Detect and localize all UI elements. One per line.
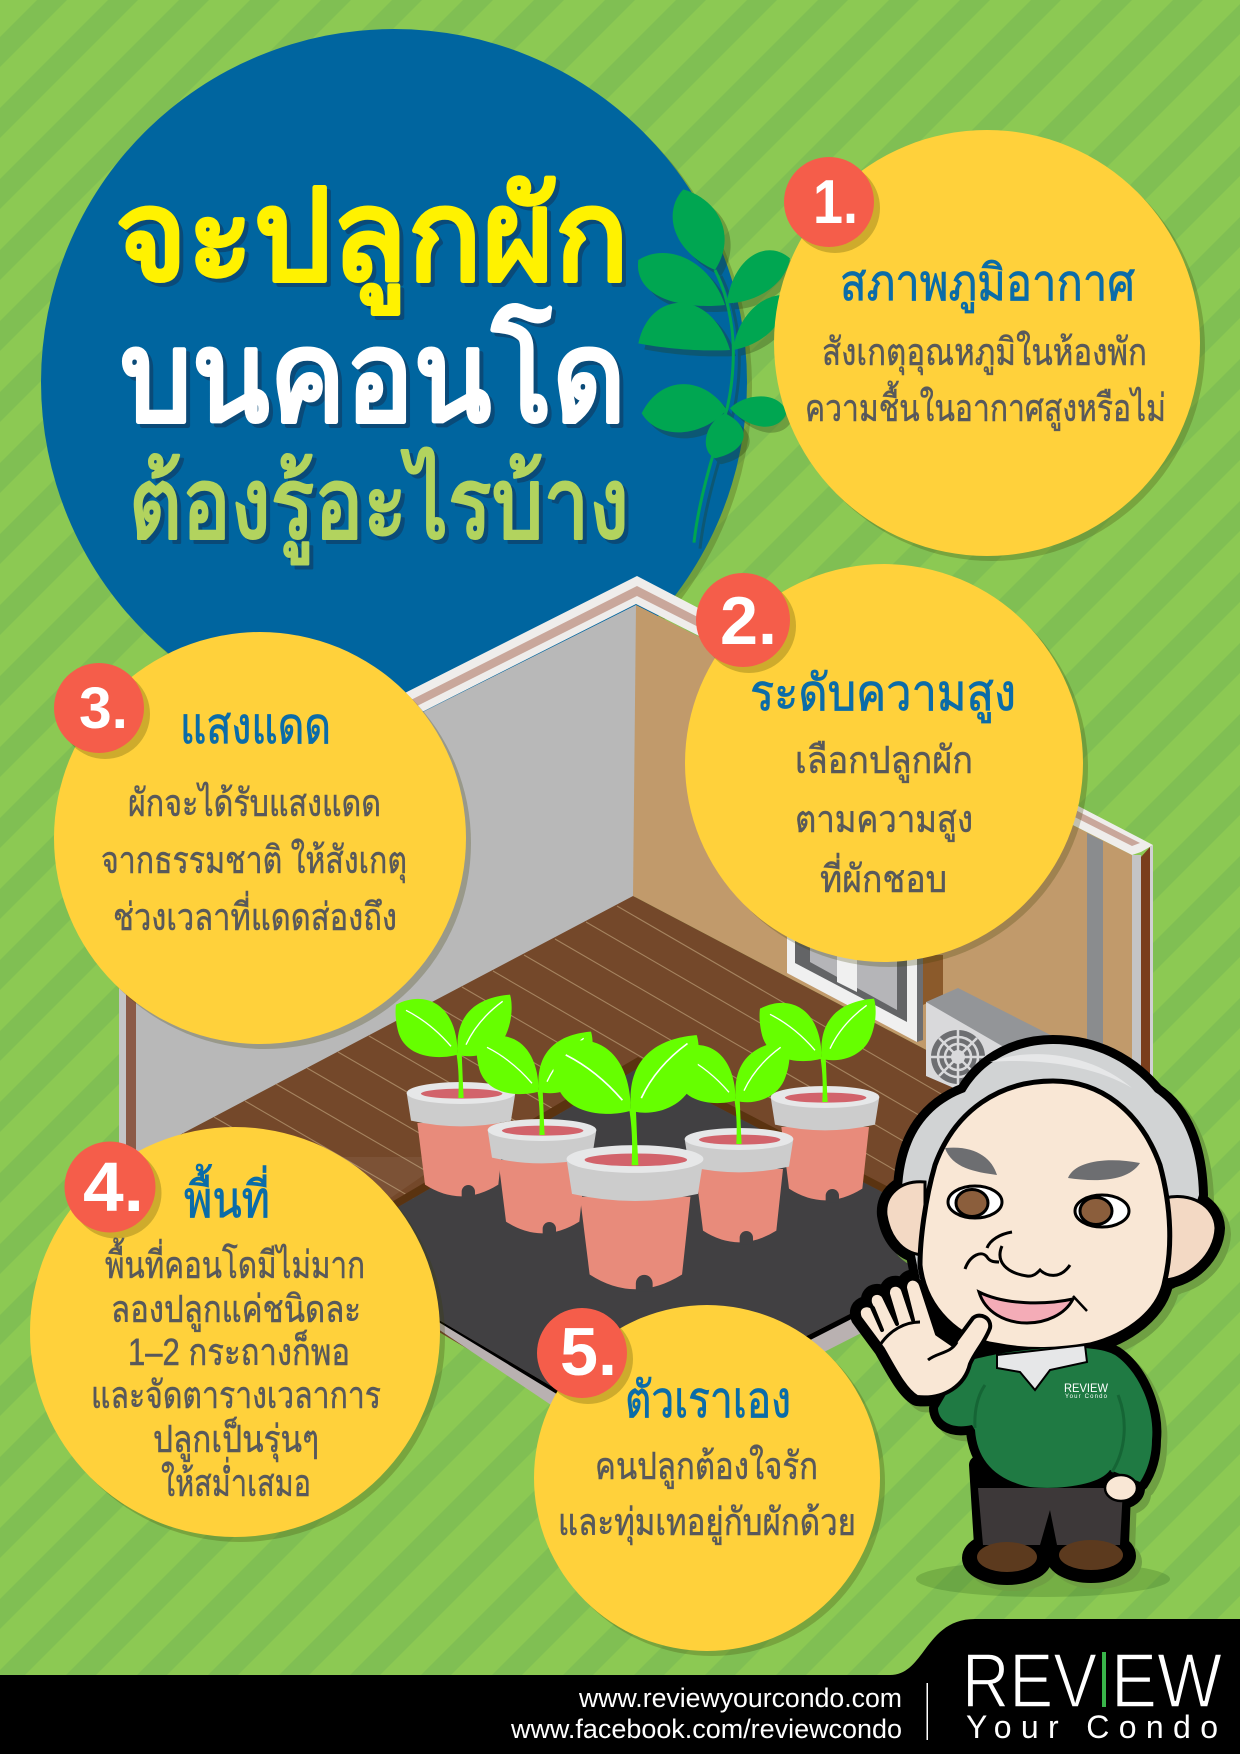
panel: 4 space <box>30 1127 445 1542</box>
body text: ที่ผักชอบ <box>820 853 947 901</box>
panel: 1 climate <box>774 130 1205 561</box>
body text: ผักจะได้รับแสงแดด <box>128 782 381 825</box>
silhouette outline <box>859 1044 1216 1576</box>
body text: จากธรรมชาติ ให้สังเกตุ <box>101 839 407 883</box>
body text: ปลูกเป็นรุ่นๆ <box>153 1416 319 1462</box>
window <box>787 900 943 1042</box>
logo: EW <box>1111 1638 1222 1724</box>
body text: เลือกปลูกผัก <box>795 740 973 783</box>
body text: ช่วงเวลาที่แดดส่องถึง <box>113 891 397 939</box>
icon: green leaf branch <box>638 189 796 549</box>
footer bar <box>0 1619 1240 1754</box>
body text <box>101 782 407 939</box>
heading: พื้นที่ <box>184 1164 270 1228</box>
shoes <box>977 1540 1123 1572</box>
body text <box>805 331 1166 431</box>
panel: 2 height <box>685 564 1088 967</box>
wall top bands <box>119 576 1153 865</box>
badge 5 <box>537 1308 633 1404</box>
face <box>920 1081 1170 1350</box>
title: จะปลูกผัก <box>119 169 633 318</box>
website urls <box>510 1683 902 1744</box>
badge 4: 4. <box>83 1148 144 1226</box>
pants <box>978 1488 1123 1545</box>
right wall <box>633 605 1132 1158</box>
sleeve crease <box>975 1385 1124 1472</box>
ears <box>886 1182 1216 1280</box>
air conditioner <box>926 988 1090 1125</box>
body text: ตามความสูง <box>795 799 973 842</box>
badge 5: 5. <box>560 1314 617 1390</box>
heading: ตัวเราเอง <box>625 1372 791 1428</box>
eyes <box>948 1186 1129 1227</box>
divider <box>926 1683 928 1740</box>
body text: พื้นที่คอนโดมีไม่มาก <box>105 1237 365 1287</box>
body text: ลองปลูกแค่ชนิดละ <box>111 1289 361 1332</box>
eyebrows <box>945 1148 1140 1180</box>
body text <box>91 1237 381 1505</box>
sweater <box>938 1347 1152 1488</box>
badge 1 <box>784 157 880 253</box>
left wall <box>136 605 636 1158</box>
silhouette shadow <box>865 1050 1222 1582</box>
badge 2 <box>696 573 796 673</box>
body text: 1–2 กระถางก็พอ <box>128 1329 350 1374</box>
title: บนคอนโด <box>120 306 626 449</box>
palm crease <box>880 1322 957 1360</box>
ground shadow <box>916 1561 1170 1597</box>
waist hand <box>1105 1475 1137 1501</box>
badge 2: 2. <box>720 583 777 659</box>
body text <box>558 1445 856 1545</box>
icon: potted seedlings <box>396 995 879 1292</box>
badge 3 <box>54 663 150 759</box>
shirt logo: REVIEW <box>1064 1381 1109 1395</box>
hair <box>902 1044 1199 1280</box>
raised hand <box>859 1279 990 1397</box>
panel: 5 ourselves <box>534 1305 885 1656</box>
panel: 3 sunlight <box>54 632 471 1049</box>
floor <box>180 896 953 1386</box>
body text: และจัดตารางเวลาการ <box>91 1375 381 1417</box>
shirt logo: Your Condo <box>1065 1394 1108 1400</box>
body text: และทุ่มเทอยู่กับผักด้วย <box>558 1502 856 1545</box>
title: ต้องรู้อะไรบ้าง <box>133 452 633 568</box>
hair highlight <box>990 1054 1132 1088</box>
logo: Your Condo <box>966 1709 1218 1745</box>
logo <box>962 1638 1222 1745</box>
panel: blue title circle <box>41 29 752 740</box>
smile line <box>1073 1296 1087 1311</box>
title: จะปลูกผัก <box>115 165 629 314</box>
badge 1: 1. <box>813 168 858 237</box>
mascot character <box>859 1044 1222 1597</box>
body text: สังเกตุอุณหภูมิในห้องพัก <box>822 331 1147 375</box>
badge 3: 3. <box>79 676 128 741</box>
isometric room illustration <box>119 576 1153 1404</box>
badge 4 <box>64 1142 162 1238</box>
nose <box>965 1232 1070 1276</box>
website urls: www.facebook.com/reviewcondo <box>510 1714 902 1744</box>
logo: REV <box>962 1638 1098 1724</box>
mouth <box>979 1292 1073 1323</box>
title <box>115 165 633 568</box>
heading: แสงแดด <box>180 698 331 754</box>
title: บนคอนโด <box>124 310 630 453</box>
title: ต้องรู้อะไรบ้าง <box>129 448 629 564</box>
body text <box>795 740 973 901</box>
website urls: www.reviewyourcondo.com <box>578 1683 902 1713</box>
body text: ให้สม่ำเสมอ <box>161 1457 311 1505</box>
collar <box>997 1345 1087 1390</box>
rug <box>322 1057 985 1454</box>
heading: สภาพภูมิอากาศ <box>840 255 1135 313</box>
heading: ระดับความสูง <box>750 665 1016 723</box>
right wall end column <box>1087 833 1153 1185</box>
left wall end column <box>119 860 136 1200</box>
body text: คนปลูกต้องใจรัก <box>595 1445 818 1489</box>
